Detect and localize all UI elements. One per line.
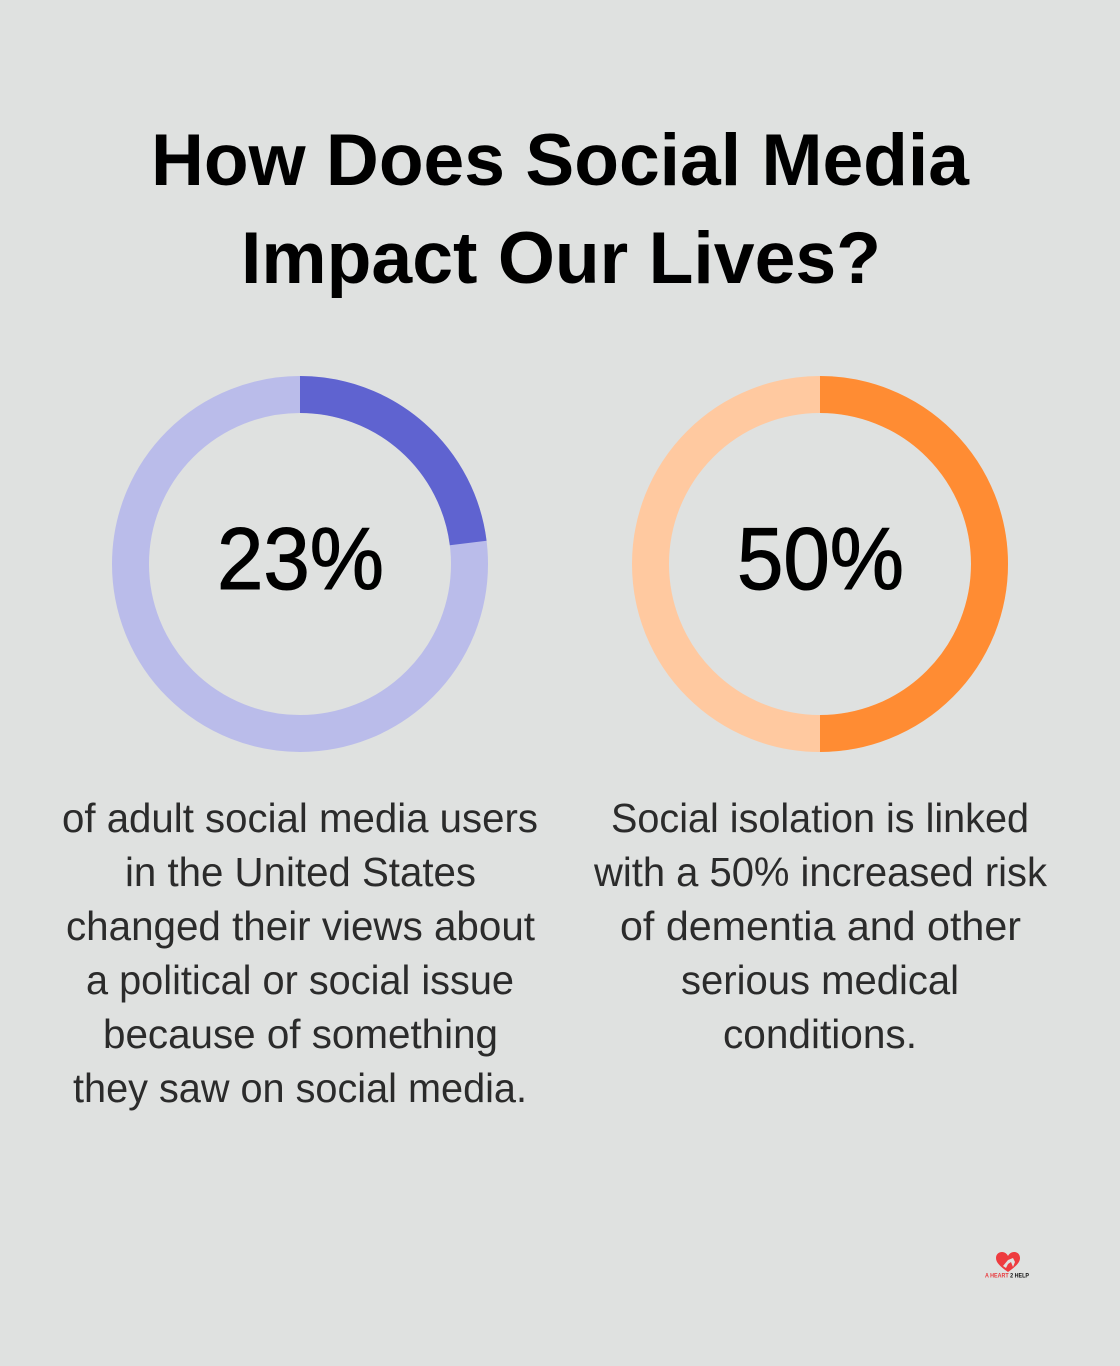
description: social isolation: Social isolation is linked [611, 795, 1029, 841]
description: social isolation: conditions. [723, 1011, 917, 1057]
description: adult social media users: of adult social media users [62, 795, 538, 841]
donut chart: 50% [650, 394, 990, 734]
description: adult social media users: in the United States [125, 849, 476, 895]
description: adult social media users [62, 795, 538, 1111]
value: 50%: 50% [737, 509, 904, 608]
title: How Does Social Media [151, 120, 970, 201]
description: social isolation: with a 50% increased risk [593, 849, 1047, 895]
description: adult social media users: changed their views about [66, 903, 536, 949]
description: adult social media users: a political or social issue [86, 957, 514, 1003]
title: Impact Our Lives? [241, 218, 881, 299]
panel: 23% statistic [62, 394, 538, 1111]
description: social isolation [593, 795, 1047, 1057]
logo wordmark: A HEART 2 HELP [985, 1274, 1029, 1280]
logo: A Heart 2 Help [985, 1252, 1029, 1280]
title [151, 120, 970, 299]
description: adult social media users: they saw on social media. [73, 1065, 527, 1111]
panel: 50% statistic [593, 394, 1047, 1057]
value: 23%: 23% [217, 509, 384, 608]
description: social isolation: of dementia and other [620, 903, 1021, 949]
description: social isolation: serious medical [681, 957, 959, 1003]
description: adult social media users: because of something [103, 1011, 498, 1057]
donut chart: 23% [130, 394, 470, 734]
icon: heart [996, 1252, 1020, 1272]
